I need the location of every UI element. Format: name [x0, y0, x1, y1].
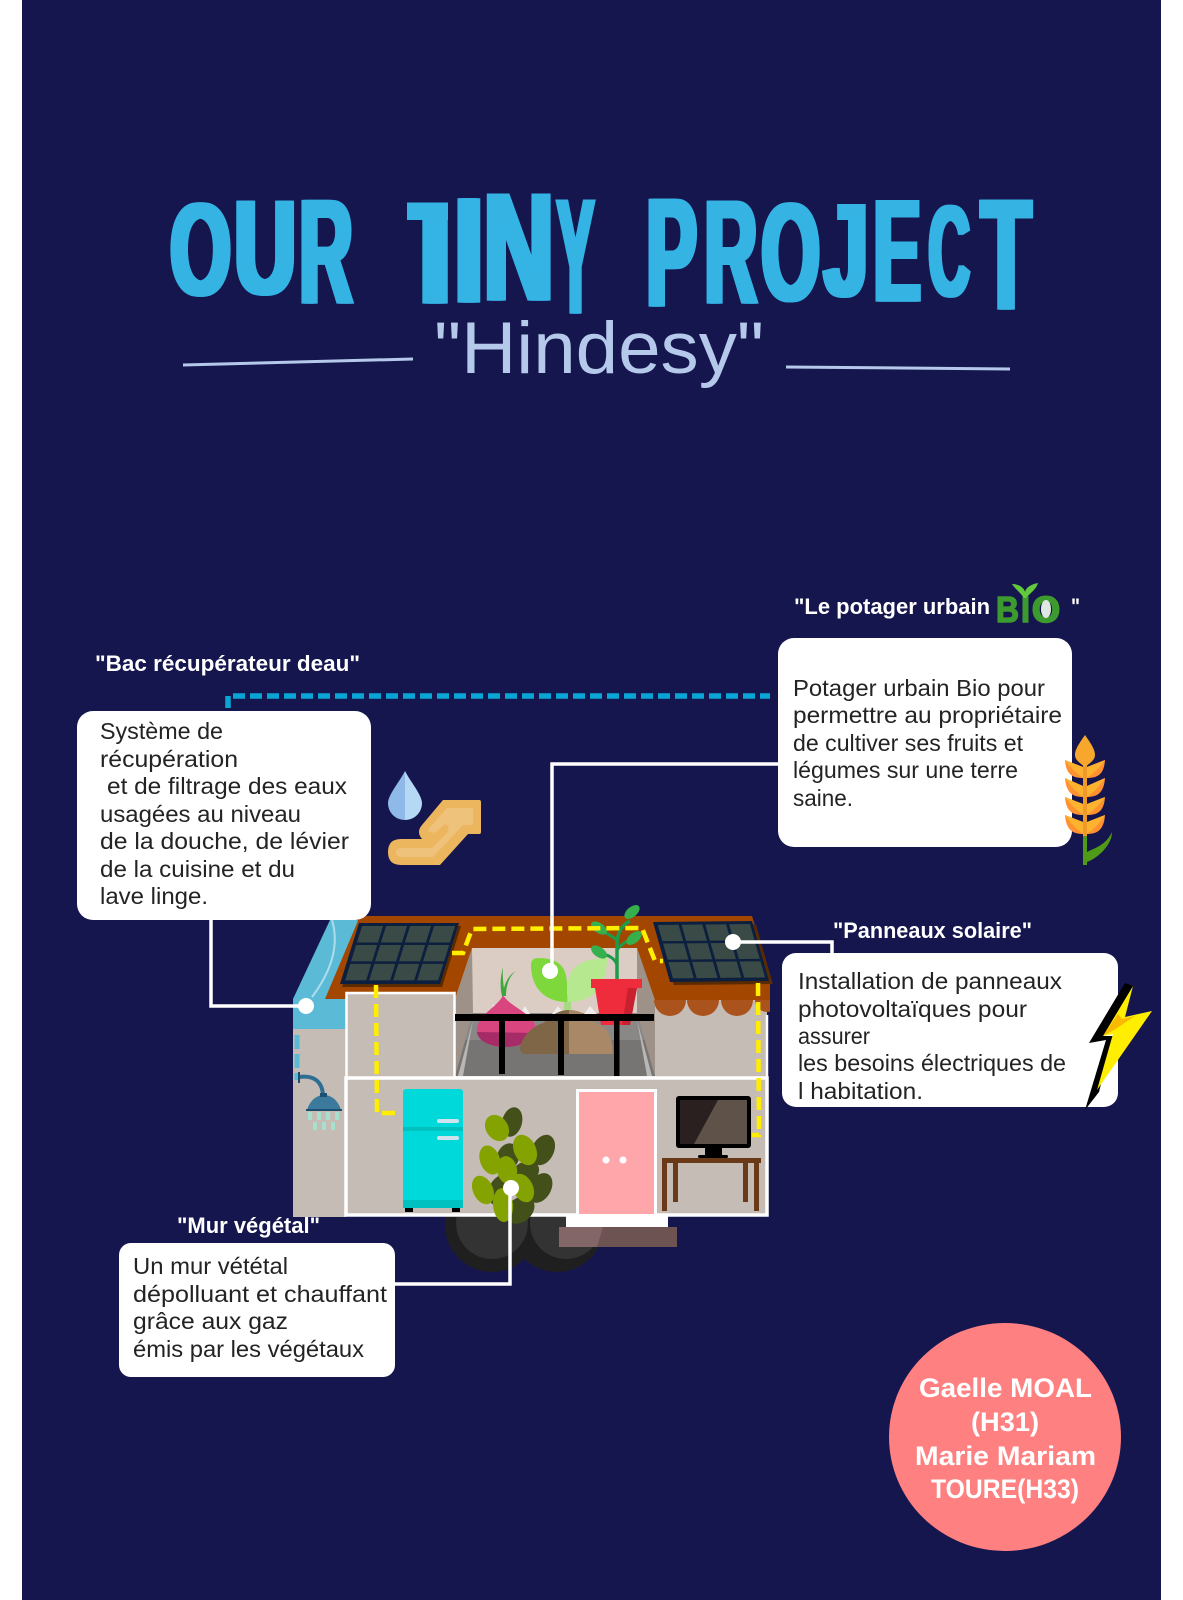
text: water recovery: et de filtrage des eaux: [107, 773, 348, 799]
logo: bio: B: [996, 589, 1019, 630]
panel: water recovery: [77, 651, 371, 920]
title: O: [762, 173, 820, 330]
connector: green wall: [395, 1180, 519, 1284]
solar panel left: [339, 923, 462, 987]
solar panel right: [653, 921, 773, 985]
television: [676, 1096, 751, 1158]
title: E: [874, 170, 921, 333]
card: urban garden: [778, 638, 1072, 847]
lower room: [346, 1078, 767, 1215]
text: solar panels: [798, 968, 1066, 1104]
connector: garden: [542, 764, 778, 979]
potted plant: [589, 902, 644, 1025]
shower: [298, 1072, 342, 1130]
panel: solar panels: [782, 918, 1118, 1107]
upper right wall: [654, 1000, 770, 1076]
title: U: [234, 172, 296, 323]
text: solar panels: Installation de panneaux: [798, 968, 1063, 994]
subtitle: "Hindesy": [434, 308, 764, 389]
title: T: [398, 173, 472, 335]
title: N: [484, 162, 554, 334]
card: green wall: [119, 1243, 395, 1377]
text: water recovery: de la douche, de lévier: [100, 828, 349, 854]
title: J: [824, 177, 868, 325]
text: water recovery: Système de: [100, 718, 223, 744]
text: water recovery: lave linge.: [100, 883, 208, 909]
title: O: [170, 175, 231, 323]
badge: authors: TOURE(H33): [931, 1474, 1079, 1504]
text: green wall: émis par les végétaux: [133, 1336, 365, 1362]
title: R: [704, 169, 757, 335]
logo: bio: O: [1032, 589, 1060, 630]
onion: [477, 967, 535, 1047]
text: water recovery: usagées au niveau: [100, 801, 301, 827]
text: green wall: [133, 1253, 388, 1362]
tv table: [662, 1158, 761, 1211]
icon: water drop and hand: [388, 771, 481, 865]
connector: water tank: [211, 920, 314, 1014]
subtitle rule right: [786, 367, 1010, 369]
icon: lightning bolt: [1085, 983, 1152, 1110]
text: solar panels: photovoltaïques pour: [798, 996, 1027, 1022]
title: [170, 194, 1034, 314]
wheels: [445, 1178, 604, 1272]
card: solar panels: [782, 953, 1118, 1107]
logo: bio: I: [1021, 589, 1030, 630]
subtitle rule left: [183, 359, 413, 365]
text: urban garden: légumes sur une terre: [793, 757, 1018, 783]
heading: green wall: "Mur végétal": [177, 1213, 320, 1238]
fridge: [403, 1089, 463, 1212]
card: water recovery: [77, 711, 371, 920]
text: green wall: grâce aux gaz: [133, 1308, 288, 1334]
text: urban garden: saine.: [793, 785, 853, 811]
title: P: [646, 166, 697, 339]
icon: wheat: [1065, 735, 1112, 865]
connector: solar panels: [725, 934, 832, 953]
title: R: [299, 169, 353, 335]
badge: authors: Gaelle MOAL: [919, 1373, 1092, 1403]
text: solar panels: les besoins électriques de: [798, 1050, 1066, 1076]
title: T: [981, 166, 1031, 343]
water drip line: [294, 1035, 300, 1080]
heading: solar panels: "Panneaux solaire": [833, 918, 1032, 943]
heading: urban garden: "Le potager urbain: [794, 594, 990, 619]
badge: authors: Marie Mariam: [915, 1441, 1096, 1471]
closing quote: ": [1071, 594, 1080, 619]
panel: urban garden: [778, 583, 1080, 847]
text: solar panels: assurer: [798, 1023, 870, 1049]
text: urban garden: permettre au propriétaire: [793, 702, 1062, 728]
heading: water recovery: "Bac récupérateur deau": [95, 651, 360, 676]
text: solar panels: l habitation.: [798, 1078, 923, 1104]
left wall: [293, 1029, 346, 1217]
door step: [559, 1216, 677, 1247]
badge: authors: (H31): [971, 1407, 1039, 1437]
roof: [325, 916, 770, 1000]
text: water recovery: récupération: [100, 746, 238, 772]
panel: green wall: [119, 1213, 395, 1377]
big sprout: [531, 958, 607, 1015]
title: I: [454, 166, 484, 334]
soil mound: [520, 1010, 613, 1054]
text: water recovery: de la cuisine et du: [100, 856, 295, 882]
text: urban garden: de cultiver ses fruits et: [793, 730, 1024, 756]
house illustration: [293, 902, 779, 1272]
logo: bio: [996, 583, 1060, 630]
badge: authors: [889, 1323, 1121, 1551]
water tank: [293, 920, 358, 1029]
text: urban garden: Potager urbain Bio pour: [793, 675, 1045, 701]
greenhouse room: [455, 945, 655, 1077]
electric wiring: [376, 928, 759, 1135]
text: water recovery: [100, 718, 349, 909]
green wall plant: [468, 1105, 560, 1229]
text: green wall: dépolluant et chauffant: [133, 1281, 388, 1307]
dashed water line: [228, 696, 770, 708]
title: C: [929, 179, 970, 324]
text: urban garden: [793, 675, 1062, 811]
text: green wall: Un mur vététal: [133, 1253, 288, 1279]
title: Y: [556, 166, 595, 349]
door: [576, 1089, 657, 1216]
plant table: [455, 1014, 654, 1076]
upper left room: [346, 993, 454, 1078]
